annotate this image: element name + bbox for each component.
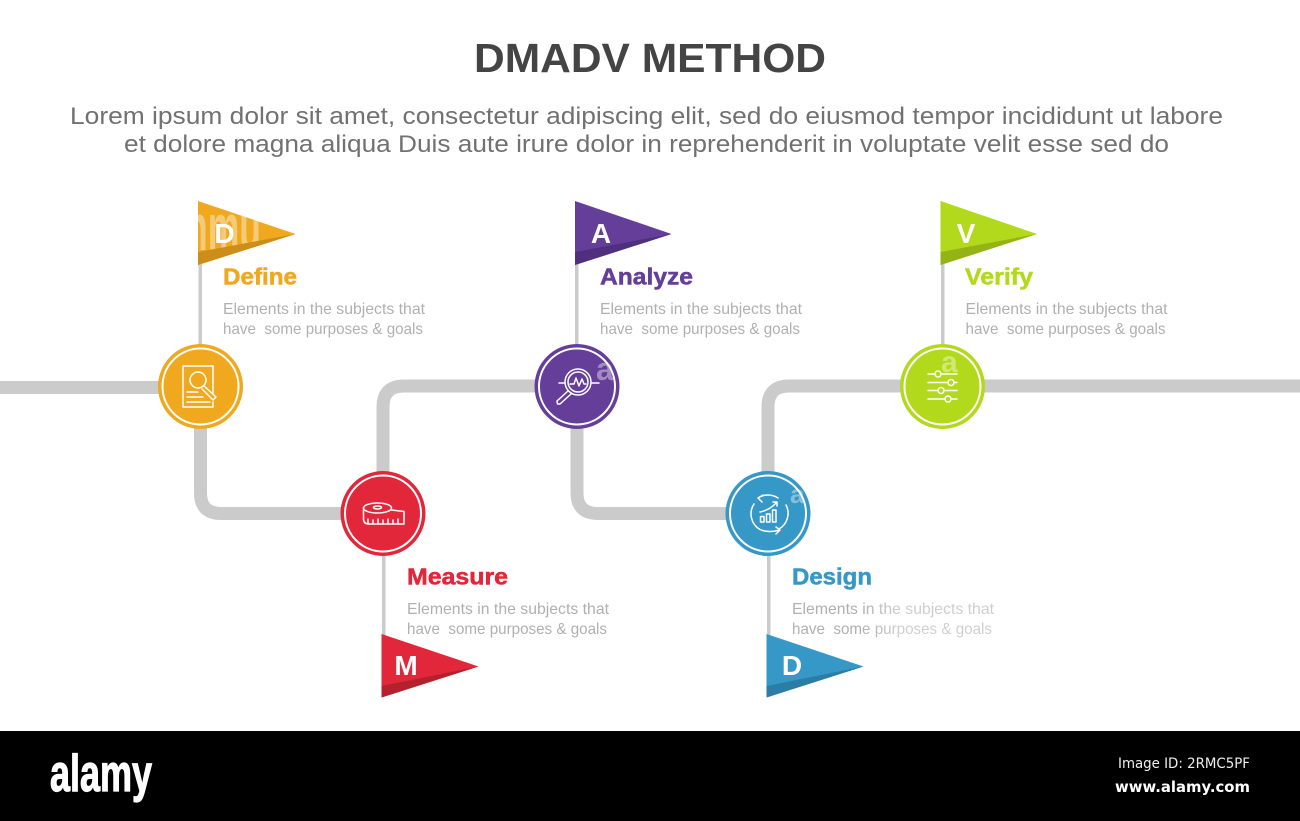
flag: Verify: V [957,218,976,249]
description: Analyze: Elements in the subjects that [600,301,803,318]
description: Define: Elements in the subjects that [223,301,426,318]
flag: Measure: M [394,650,418,681]
heading: Define: Define [223,264,297,290]
description: Analyze [600,301,803,338]
intro text [70,103,1223,158]
step: Verify [900,201,1168,429]
heading: Design: Design [792,564,872,590]
node: Analyze [534,344,620,429]
description: Verify: have some purposes & goals [966,321,1166,338]
description: Verify [966,301,1168,338]
step: Analyze [534,201,803,429]
flag pole: Design [767,550,770,640]
intro text: et dolore magna aliqua Duis aute irure dolor in reprehenderit in voluptate velit esse sed do [124,131,1169,158]
description: Measure [407,601,610,638]
logo: alamy: alamy [50,745,152,803]
flag: Analyze: A [591,218,611,249]
icon: document with magnifier [183,366,216,407]
flag: Define [198,201,296,265]
step: Define [158,190,426,429]
flag: Verify [940,201,1037,265]
icon: magnifier with pulse [557,369,599,404]
flag: Design [766,634,864,698]
title: DMADV METHOD [474,35,826,81]
node: Measure [340,471,426,556]
description: Design: Elements in the subjects that [792,601,995,618]
website: www.alamy.com [1115,778,1250,796]
node: Analyze: a [596,351,614,387]
footer band [0,731,1300,821]
node: Design: a [790,479,805,509]
node: Verify [900,344,985,429]
flag pole: Measure [382,550,386,640]
flag: Measure [382,634,478,698]
flag: Define: D [214,218,235,249]
flag pole: Define [198,255,202,350]
description: Verify: Elements in the subjects that [966,301,1168,318]
flag: Define: nmu [186,190,261,264]
description: Define [223,301,426,338]
step: Measure [340,471,610,698]
description: Measure: Elements in the subjects that [407,601,610,618]
image id: Image ID: 2RMC5PF [1118,756,1250,772]
icon: cycle with bar chart [751,495,788,534]
icon: sliders [928,371,957,402]
description: Analyze: have some purposes & goals [600,321,800,338]
node: Define [158,344,243,429]
description: Define: have some purposes & goals [223,321,423,338]
heading: Verify: Verify [965,264,1033,290]
flag: Design: D [782,650,802,681]
description: Measure: have some purposes & goals [407,621,607,638]
description: Design [792,601,995,638]
description: Design: have some purposes & goals [792,621,992,638]
flag: Analyze [575,201,672,265]
node: Design [726,471,810,556]
heading: Measure: Measure [407,564,508,590]
flag pole: Analyze [575,255,578,350]
winding timeline path [0,386,1300,514]
heading: Analyze: Analyze [600,264,693,290]
intro text: Lorem ipsum dolor sit amet, consectetur adipiscing elit, sed do eiusmod tempor incididunt ut labore [70,103,1223,130]
icon: measuring tape [364,503,404,524]
node: Verify: a [941,346,958,379]
flag pole: Verify [941,255,944,350]
step: Design [726,471,995,698]
